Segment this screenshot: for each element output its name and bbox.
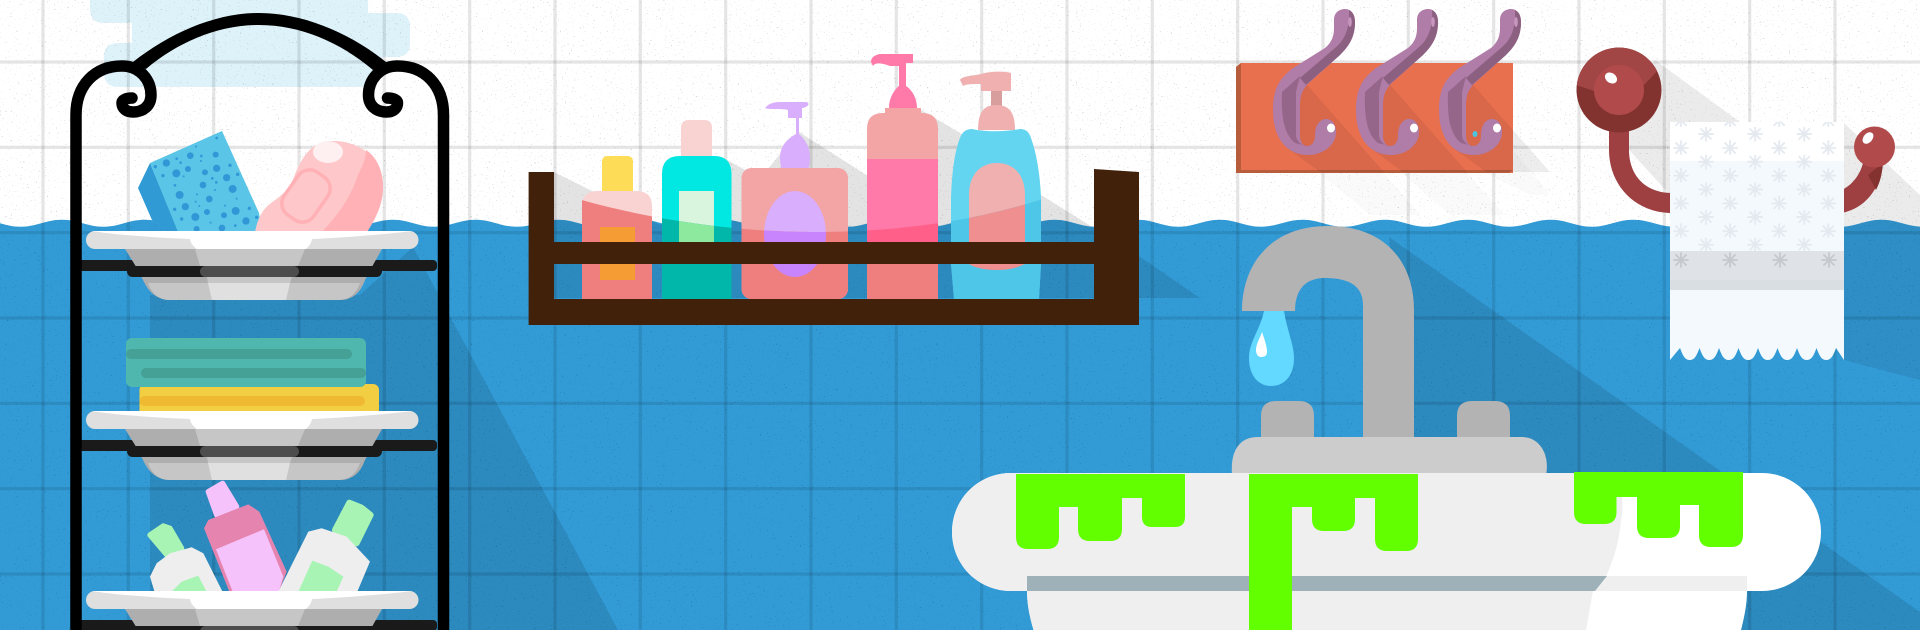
rack frame — [76, 13, 444, 630]
faucet base — [1232, 437, 1547, 475]
end knob — [1854, 126, 1895, 168]
sink bowl — [1027, 591, 1747, 630]
folded towels — [126, 338, 379, 418]
bottle: pink — [204, 483, 287, 593]
bottle: left green — [150, 526, 223, 593]
plate: top shelf — [78, 231, 437, 300]
bottle: blue pump — [951, 72, 1041, 299]
shelf frame — [529, 169, 1139, 325]
bottles on bottom shelf — [150, 483, 371, 593]
bar right arm — [1842, 163, 1883, 213]
plate: bottom shelf — [78, 591, 437, 630]
sink band — [1027, 576, 1747, 591]
icon: sponge — [138, 131, 262, 232]
green slime right — [1574, 472, 1743, 547]
green slime centre — [1249, 474, 1418, 630]
steam cloud — [90, 0, 410, 87]
wall disc — [1576, 48, 1662, 132]
hook 3 — [1439, 9, 1550, 172]
long shadow: rack — [150, 247, 618, 630]
bottle: tall pink pump — [867, 54, 938, 299]
bar left arm — [1609, 125, 1672, 213]
plate: middle shelf — [78, 411, 437, 480]
bottle: square purple soap dispenser — [742, 102, 848, 299]
left handle — [1261, 401, 1314, 440]
hanging towel — [1670, 122, 1844, 360]
sink rim — [952, 473, 1821, 591]
towel bar — [1570, 40, 1895, 213]
flood water — [0, 220, 1920, 630]
bottle: teal mouthwash — [662, 120, 732, 299]
coat hook rack — [1236, 9, 1550, 215]
sink — [952, 472, 1821, 630]
bottle: yellow cap lotion — [582, 156, 652, 299]
end knob highlight — [1860, 130, 1876, 146]
hook 2 — [1356, 9, 1467, 172]
spout — [1242, 226, 1414, 440]
long shadow: shelf — [554, 108, 1200, 298]
knob highlight — [1603, 70, 1619, 86]
faucet — [1232, 226, 1547, 475]
towel star pattern — [1670, 122, 1844, 251]
icon: soap bar — [255, 141, 383, 232]
long shadow: towel and hook — [1610, 60, 1920, 380]
green slime left — [1016, 474, 1185, 549]
bottle shelf — [529, 54, 1139, 325]
hook 1 — [1273, 9, 1384, 172]
long shadow: faucet — [1389, 237, 1920, 630]
bottle: right green — [278, 503, 371, 593]
knob — [1594, 65, 1644, 115]
wire rack — [76, 13, 444, 630]
hook board shadow fade — [1319, 150, 1550, 215]
towel band — [1670, 251, 1844, 290]
water drop — [1249, 311, 1294, 386]
cyan dot — [1472, 131, 1478, 137]
hook board — [1236, 63, 1513, 173]
right handle — [1457, 401, 1510, 440]
